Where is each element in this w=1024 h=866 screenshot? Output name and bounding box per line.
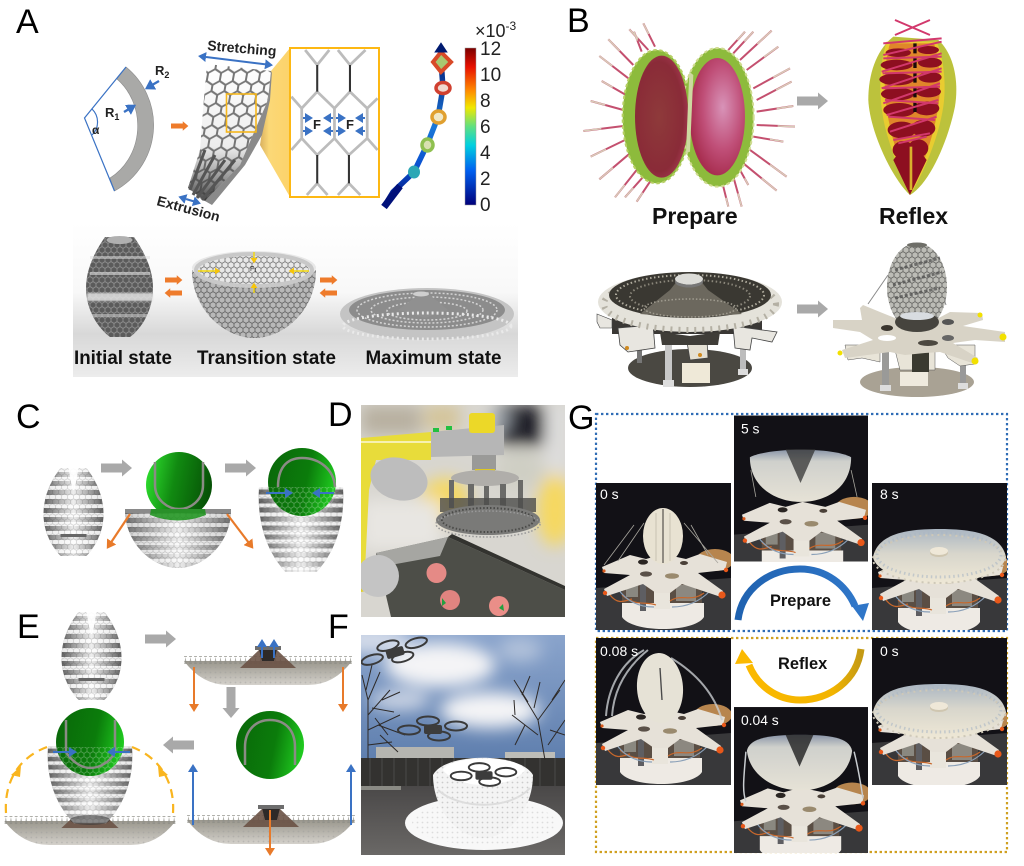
label F: F xyxy=(328,608,349,646)
robot: open disc gripper xyxy=(597,272,782,387)
trajectory arrowheads xyxy=(11,766,168,777)
elbows xyxy=(366,451,432,507)
colour bar: 0 xyxy=(480,195,491,216)
sector sketch xyxy=(84,63,169,191)
grey arrows xyxy=(797,92,828,318)
zoomed hexagon box: F xyxy=(346,117,354,132)
capsule gripping ball xyxy=(259,448,343,572)
panel B: flytrap and gripper: Reflex xyxy=(879,203,948,229)
robot: closed capsule gripper xyxy=(833,242,1006,397)
trees xyxy=(362,665,565,760)
photo 0 s: 0 s xyxy=(600,486,619,502)
transition state bowl: 1 xyxy=(254,268,257,274)
yellow arm xyxy=(361,432,431,572)
photo 0 s xyxy=(596,483,731,630)
reflex dotted frame xyxy=(596,638,1007,852)
sector sketch: 2 xyxy=(164,70,169,80)
drones xyxy=(358,631,431,673)
strain contour strip xyxy=(384,45,451,207)
colour bar: 2 xyxy=(480,169,491,190)
colour bar xyxy=(465,19,517,216)
stretched mesh sheet xyxy=(155,37,277,225)
panel F: drone photo xyxy=(361,635,565,855)
strawberries xyxy=(426,563,509,616)
upper disc state xyxy=(184,641,352,710)
panel: three states render: Maximum state xyxy=(366,348,502,369)
panel A: structure design xyxy=(16,3,518,377)
grey arm link xyxy=(431,425,504,457)
orange arrows xyxy=(108,514,252,547)
panel E: catch sequence xyxy=(4,608,355,854)
conveyor xyxy=(376,537,565,617)
colour bar: 8 xyxy=(480,91,491,112)
closure on disc with ball xyxy=(4,708,176,845)
white flower gripper xyxy=(405,758,563,850)
colour bar: 10 xyxy=(480,65,501,86)
panel C: grasp sequence xyxy=(16,398,343,572)
capsule xyxy=(62,612,122,700)
panel B: flytrap and gripper: Prepare xyxy=(652,203,738,229)
sector sketch: R xyxy=(105,105,114,120)
photo 0 s reflex: 0 s xyxy=(880,643,899,659)
colour bar: 12 xyxy=(480,39,501,60)
stretched mesh sheet: Stretching xyxy=(207,37,277,59)
label A: A xyxy=(16,3,39,41)
colour bar: 4 xyxy=(480,143,491,164)
colour bar: -3 xyxy=(506,19,517,33)
arrow: sector to mesh xyxy=(171,121,188,131)
panel: three states render: Transition state xyxy=(197,348,336,369)
zoom fan xyxy=(260,48,290,197)
photo 8 s: 8 s xyxy=(880,486,899,502)
panel D: robot arm render xyxy=(361,405,565,617)
photo 5 s: 5 s xyxy=(741,420,760,436)
photo 0.08 s: 0.08 s xyxy=(600,643,638,659)
orange two-way arrows xyxy=(165,275,337,298)
initial state capsule xyxy=(86,236,153,337)
photo 0.08 s xyxy=(596,638,731,785)
panel: three states render: Initial state xyxy=(74,347,172,369)
reflex/prepare cycle arrows: Reflex xyxy=(778,655,827,673)
label E: E xyxy=(17,608,40,646)
closed flytrap xyxy=(868,20,956,195)
reflex/prepare cycle arrows: Prepare xyxy=(770,592,831,610)
capsule xyxy=(44,468,104,556)
photo 0 s reflex xyxy=(872,638,1007,785)
prepare dotted frame xyxy=(596,414,1007,631)
open flytrap xyxy=(583,23,795,207)
transition state bowl xyxy=(192,251,316,338)
label G: G xyxy=(568,399,594,437)
transition state bowl: F xyxy=(250,266,254,273)
reflex/prepare cycle arrows xyxy=(735,569,869,700)
sector sketch: 1 xyxy=(114,112,119,122)
zoomed hexagon box xyxy=(290,48,379,197)
gripper xyxy=(436,455,540,537)
photo 5 s xyxy=(734,416,868,562)
sector sketch: R xyxy=(155,63,164,78)
label C: C xyxy=(16,398,41,436)
photo 0.04 s xyxy=(734,707,868,853)
photo 8 s xyxy=(872,483,1007,630)
tennis ball over bowl xyxy=(125,452,231,568)
sector sketch: α xyxy=(92,123,100,137)
lower disc state xyxy=(187,766,355,854)
label B: B xyxy=(567,2,590,40)
label D: D xyxy=(328,396,353,434)
photo 0.04 s: 0.04 s xyxy=(741,712,779,728)
panel B: flytrap and gripper xyxy=(567,2,1006,397)
grey arrows xyxy=(101,460,256,476)
maximum state disc xyxy=(340,288,514,340)
zoomed hexagon box: F xyxy=(313,117,321,132)
panel G: high-speed sequence xyxy=(568,399,1010,862)
panel: three states render xyxy=(73,223,518,377)
colour bar: ×10 xyxy=(475,21,506,41)
dashed trajectories xyxy=(6,747,173,813)
ball falling xyxy=(236,711,304,779)
stretched mesh sheet: Extrusion xyxy=(155,192,222,225)
grey flow arrows xyxy=(145,630,240,754)
colour bar: 6 xyxy=(480,117,491,138)
